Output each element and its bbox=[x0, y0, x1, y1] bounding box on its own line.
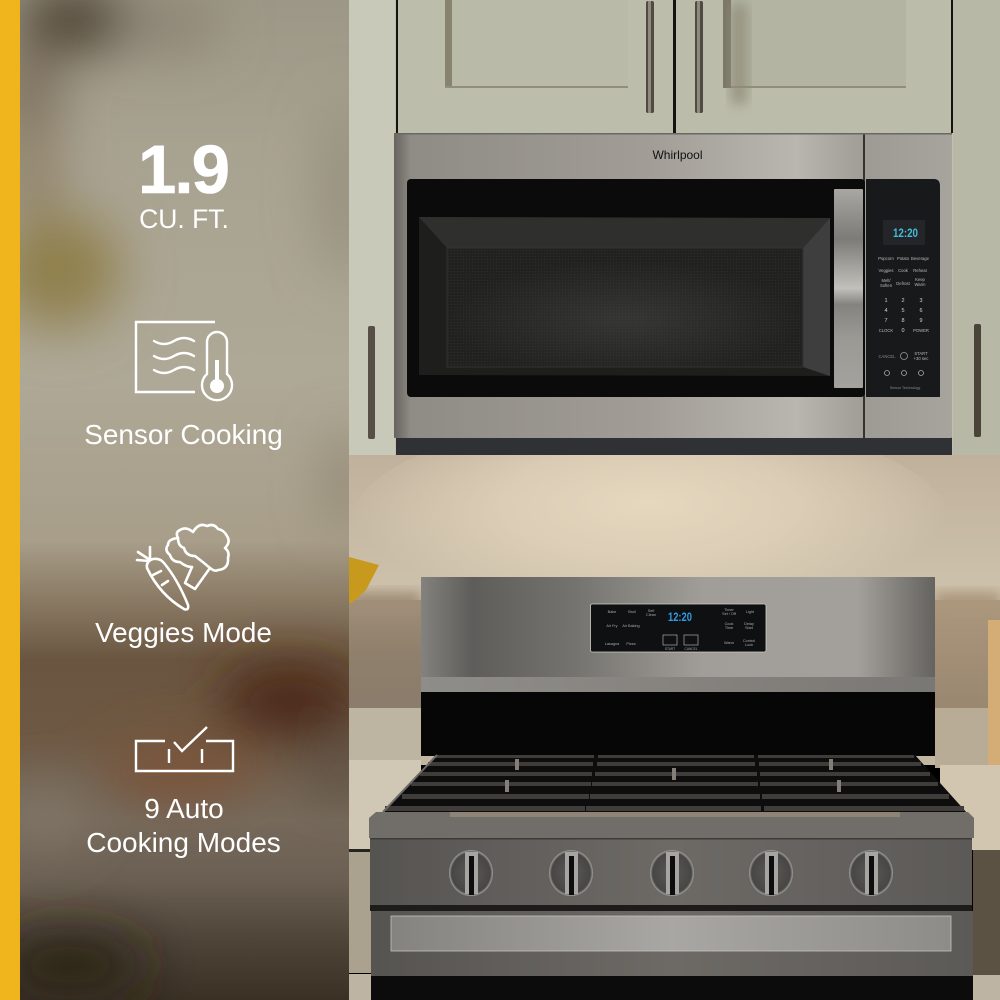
range control panel: Timer bbox=[724, 608, 735, 612]
control panel bbox=[866, 179, 940, 397]
control panel: Potato bbox=[897, 256, 910, 261]
range control panel: Delay bbox=[744, 622, 754, 626]
control panel: 7 bbox=[884, 318, 888, 324]
cooktop grates bbox=[383, 755, 967, 813]
yellow side stripe bbox=[0, 0, 20, 1000]
control panel: 9 bbox=[919, 318, 923, 324]
control panel: Beverage bbox=[911, 256, 930, 261]
wooden board bbox=[988, 620, 1000, 765]
backguard bbox=[421, 577, 935, 756]
range control panel: Light bbox=[746, 610, 755, 614]
range control panel: Broil bbox=[628, 610, 636, 614]
control panel: START bbox=[914, 351, 928, 356]
control panel: Defrost bbox=[896, 281, 911, 286]
control panel: 2 bbox=[901, 298, 905, 304]
knobs bbox=[449, 850, 893, 896]
range bbox=[369, 577, 974, 1000]
control panel: 8 bbox=[901, 318, 905, 324]
capacity stat: 1.9 bbox=[138, 131, 228, 208]
control panel: 5 bbox=[901, 308, 905, 314]
range control panel: Air Baking bbox=[622, 624, 640, 628]
range control panel: Warm bbox=[724, 641, 734, 645]
range control panel: Lock bbox=[745, 643, 753, 647]
cabinet handles bbox=[368, 1, 981, 439]
range control panel: Bake bbox=[608, 610, 616, 614]
control panel: Soften bbox=[880, 283, 893, 288]
range control panel bbox=[590, 604, 766, 652]
label: auto cooking modes: 9 Auto bbox=[144, 793, 224, 824]
control panel: Cook bbox=[898, 268, 909, 273]
door window bbox=[407, 179, 865, 397]
display bbox=[883, 220, 925, 245]
control panel: 3 bbox=[919, 298, 923, 304]
range control panel: Time bbox=[725, 626, 733, 630]
control panel: 12:20 bbox=[893, 226, 918, 240]
control panel: Keep bbox=[915, 277, 926, 282]
icon: carrot and broccoli bbox=[137, 525, 229, 610]
control panel: Melt/ bbox=[881, 278, 891, 283]
range control panel: Clean bbox=[646, 613, 656, 617]
control panel: Sensor Technology bbox=[890, 386, 920, 390]
control panel: Warm bbox=[914, 282, 926, 287]
range control panel: Self bbox=[648, 609, 655, 613]
range control panel: CANCEL bbox=[685, 647, 698, 651]
range control panel: Set / Off bbox=[722, 612, 737, 616]
blurred left panel bbox=[20, 0, 349, 1000]
yellow utensil bbox=[349, 557, 379, 603]
oven door and handle bbox=[371, 911, 973, 1000]
wall with under-cabinet light bbox=[349, 455, 1000, 768]
range control panel: Cook bbox=[725, 622, 734, 626]
label: sensor cooking: Sensor Cooking bbox=[84, 419, 283, 450]
stovetop edge and knob panel bbox=[369, 812, 974, 911]
cabinets bbox=[349, 0, 1000, 457]
label: auto cooking modes bbox=[86, 793, 281, 858]
label: auto cooking modes: Cooking Modes bbox=[86, 827, 281, 858]
countertops bbox=[349, 760, 1000, 1000]
kitchen photo scene bbox=[349, 0, 1000, 1000]
control panel: Reheat bbox=[913, 268, 928, 273]
icon: auto modes checkbox bbox=[136, 727, 233, 771]
control panel: Popcorn bbox=[878, 256, 894, 261]
range control panel: Start bbox=[745, 626, 754, 630]
range control panel: Control bbox=[743, 639, 755, 643]
whirlpool logo: Whirlpool bbox=[652, 148, 703, 162]
control panel: +30 sec bbox=[914, 356, 928, 361]
range control panel: START bbox=[665, 647, 675, 651]
control panel: 6 bbox=[919, 308, 923, 314]
label: veggies mode: Veggies Mode bbox=[95, 617, 272, 648]
microwave bbox=[394, 133, 952, 455]
control panel: CLOCK bbox=[879, 328, 893, 333]
door handle bbox=[834, 189, 863, 388]
control panel: 1 bbox=[884, 298, 888, 304]
icon: sensor cooking bbox=[136, 322, 232, 400]
control panel: 0 bbox=[901, 328, 905, 334]
range control panel: Lasagna bbox=[605, 642, 620, 646]
capacity stat: CU. FT. bbox=[139, 204, 229, 234]
range control panel: 12:20 bbox=[668, 610, 692, 624]
control panel: CANCEL bbox=[878, 354, 896, 359]
control panel: POWER bbox=[913, 328, 929, 333]
range control panel: Air Fry bbox=[606, 624, 618, 628]
control panel: Veggies bbox=[879, 268, 893, 273]
range control panel: Pizza bbox=[626, 642, 637, 646]
control panel: 4 bbox=[884, 308, 888, 314]
